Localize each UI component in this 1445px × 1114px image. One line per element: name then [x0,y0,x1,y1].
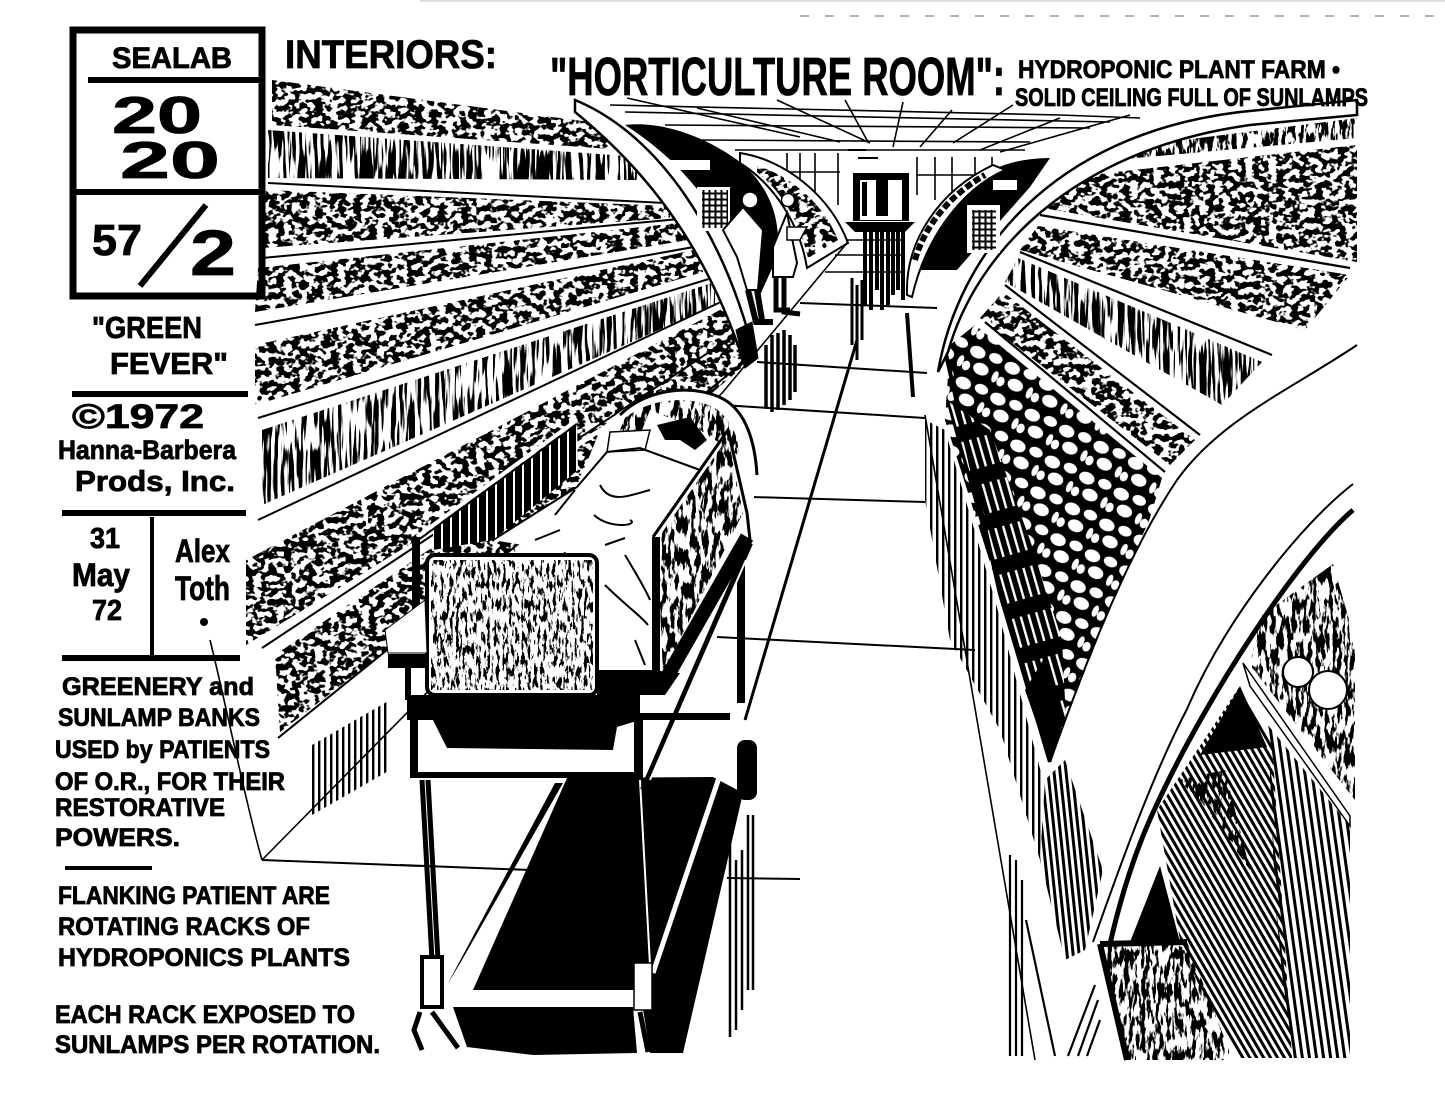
title block [70,30,262,296]
notes: flanking racks [58,882,350,972]
date [72,523,130,627]
two doctors [723,192,807,322]
notes: greenery: OF O.R., FOR THEIR [55,768,285,796]
notes: rotation: SUNLAMPS PER ROTATION. [55,1031,380,1059]
notes: greenery: POWERS. [55,824,180,852]
episode name [92,310,228,381]
left rack: plant shelves [246,80,750,738]
title block: show name: SEALAB [112,42,232,75]
heading note [1015,56,1368,112]
lower left rack base hatching [312,700,390,815]
back doorway [825,150,915,310]
notes: greenery [55,673,285,852]
floor hatching shadows [730,278,913,1037]
date: 31 [90,523,120,555]
left arch [575,100,758,368]
notes: greenery: RESTORATIVE [55,794,225,822]
title block: series number: 20 [112,87,202,145]
copyright: ©1972 [72,398,204,436]
divider rules [62,394,248,868]
bed: canopy and patient [493,389,757,667]
notes: greenery: SUNLAMP BANKS [58,704,260,732]
heading note: HYDROPONIC PLANT FARM • [1018,56,1340,84]
bed: undercarriage shadow [414,760,743,1055]
notes: flanking racks: ROTATING RACKS OF [58,913,310,941]
heading [285,33,1005,107]
far left rack [740,153,848,268]
artist name: Toth [175,570,230,608]
title block: series number [112,87,220,190]
bed: right side rail [643,430,757,800]
ceiling grid and back wall [610,98,1140,205]
foreground rack with fruit and grass [1100,564,1355,1060]
copyright: Prods, Inc. [75,466,235,498]
floor perspective lines [210,243,1035,1060]
scanned top edge marks [420,1,1445,16]
right middle dark opening [907,158,1050,297]
bed: foot panel [427,555,597,695]
artist name: Alex [175,533,230,569]
notes: rotation [55,1001,380,1059]
date: May [72,557,130,593]
episode name: "GREEN [92,310,202,345]
title block: episode number: 57 [92,216,142,265]
hospital bed with patient [385,389,757,1055]
bed: left side rail [412,420,578,647]
notes: flanking racks: HYDROPONICS PLANTS [58,944,350,972]
right rack: plant shelves [945,118,1357,762]
artist name [175,533,230,626]
date: 72 [92,595,122,627]
notes: greenery: USED by PATIENTS [55,736,270,764]
right wall hatching [925,420,1103,1056]
title block: episode number: 2 [190,217,236,289]
heading: "HORTICULTURE ROOM": [550,47,1005,107]
episode name: FEVER" [110,346,228,381]
notes: greenery: GREENERY and [62,673,254,701]
heading: INTERIORS: [285,33,497,77]
notes: flanking racks: FLANKING PATIENT ARE [58,882,330,910]
foreground arch [1093,484,1353,944]
title block: series number: 20 [120,132,220,190]
bed: platform and tray [385,600,730,780]
copyright [58,398,237,498]
title block: episode number [92,216,236,289]
right arch and drum outline [938,100,1357,762]
left dark opening [625,124,778,295]
notes: rotation: EACH RACK EXPOSED TO [55,1001,355,1029]
copyright: Hanna-Barbera [58,435,237,465]
